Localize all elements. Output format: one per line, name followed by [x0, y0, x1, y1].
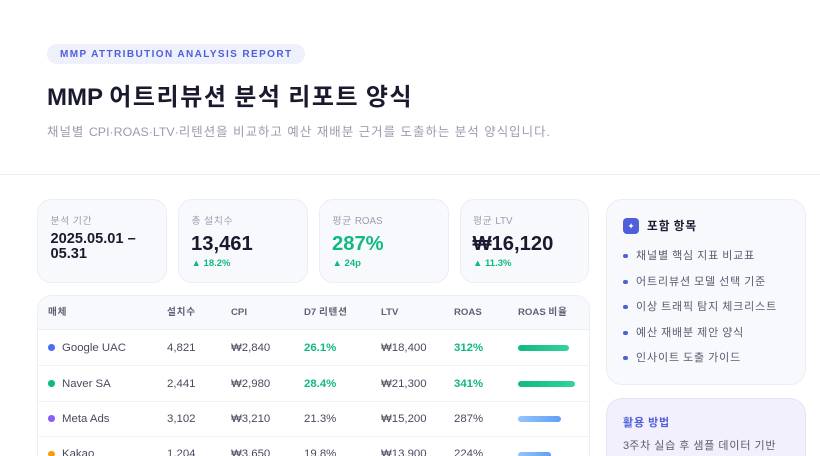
row: Meta Ads: Meta Ads — [62, 412, 110, 424]
row: Kakao — [38, 436, 588, 456]
stat card: 평균 ROAS: 평균 ROAS — [332, 216, 383, 226]
row: Naver SA: Naver SA — [62, 378, 111, 390]
stat card: 평균 ROAS: ▲ 24p — [332, 258, 361, 268]
icon: sparkle — [623, 218, 639, 234]
table header — [38, 296, 588, 330]
table header: CPI — [231, 307, 247, 318]
stat card: 분석 기간: 분석 기간 — [50, 216, 92, 226]
row: Google UAC: ₩2,840 — [231, 342, 270, 354]
badge: MMP ATTRIBUTION ANALYSIS REPORT — [60, 49, 292, 60]
table header: ROAS — [454, 307, 482, 318]
header section — [0, 0, 820, 175]
table header: 설치수 — [167, 307, 196, 318]
list: included items: 채널별 핵심 지표 비교표 — [636, 250, 755, 262]
stat card: 평균 LTV: ₩16,120 — [472, 233, 553, 255]
list: included items: 어트리뷰션 모델 선택 기준 — [636, 276, 766, 288]
subtitle: 채널별 CPI·ROAS·LTV·리텐션을 비교하고 예산 재배분 근거를 도출하는 분석 양식입니다. — [47, 125, 550, 139]
row: Meta Ads: ₩15,200 — [381, 412, 427, 424]
stat card: 평균 LTV: 평균 LTV — [473, 216, 513, 226]
badge — [47, 44, 305, 64]
table header: LTV — [381, 307, 398, 318]
row: Naver SA: 2,441 — [167, 378, 196, 390]
row: Naver SA: 341% — [454, 378, 483, 390]
panel heading: 포함 항목 — [647, 220, 697, 233]
title: MMP 어트리뷰션 분석 리포트 양식 — [47, 84, 413, 111]
table header: ROAS 비율 — [518, 307, 568, 318]
row: Naver SA: 28.4% — [304, 378, 336, 390]
row: Meta Ads: 287% — [454, 412, 483, 424]
channel comparison table — [37, 295, 590, 456]
row: Google UAC: 26.1% — [304, 342, 336, 354]
list: included items: 예산 재배분 제안 양식 — [636, 327, 744, 339]
table header: D7 리텐션 — [304, 307, 348, 318]
stat card: 총 설치수: ▲ 18.2% — [192, 258, 230, 268]
stat card: 분석 기간: 2025.05.01 – 05.31 — [50, 231, 136, 262]
table header: 매체 — [48, 307, 67, 318]
stat card: 총 설치수: 13,461 — [191, 233, 253, 255]
row: Google UAC: 312% — [454, 342, 483, 354]
stat card: 평균 ROAS: 287% — [332, 233, 384, 255]
list: included items: 인사이트 도출 가이드 — [636, 352, 741, 364]
panel heading: 활용 방법 — [623, 417, 670, 429]
stat card: 평균 ROAS — [319, 199, 448, 282]
stat card: 평균 LTV: ▲ 11.3% — [473, 258, 511, 268]
row: Google UAC — [38, 330, 588, 366]
row: Naver SA: ₩2,980 — [231, 378, 270, 390]
panel: 활용 방법 — [606, 398, 806, 456]
row: Google UAC: 4,821 — [167, 342, 196, 354]
row: Naver SA — [38, 366, 588, 402]
stat card: 분석 기간 — [37, 199, 166, 282]
stat card: 평균 LTV — [460, 199, 589, 282]
stat card: 총 설치수 — [178, 199, 308, 282]
row: Google UAC: ₩18,400 — [381, 342, 427, 354]
stat card: 총 설치수: 총 설치수 — [192, 216, 233, 226]
row: Naver SA: ₩21,300 — [381, 378, 427, 390]
usage text: 3주차 실습 후 샘플 데이터 기반 — [623, 440, 776, 452]
panel: 포함 항목 — [606, 199, 806, 385]
row: Meta Ads: 21.3% — [304, 412, 336, 424]
list: included items — [623, 250, 777, 364]
icon: sparkle: ✦ — [627, 221, 635, 231]
row: Meta Ads — [38, 401, 588, 437]
row: Meta Ads: 3,102 — [167, 412, 196, 424]
row: Meta Ads: ₩3,210 — [231, 412, 270, 424]
list: included items: 이상 트래픽 탐지 체크리스트 — [636, 301, 777, 313]
row: Google UAC: Google UAC — [62, 342, 126, 354]
